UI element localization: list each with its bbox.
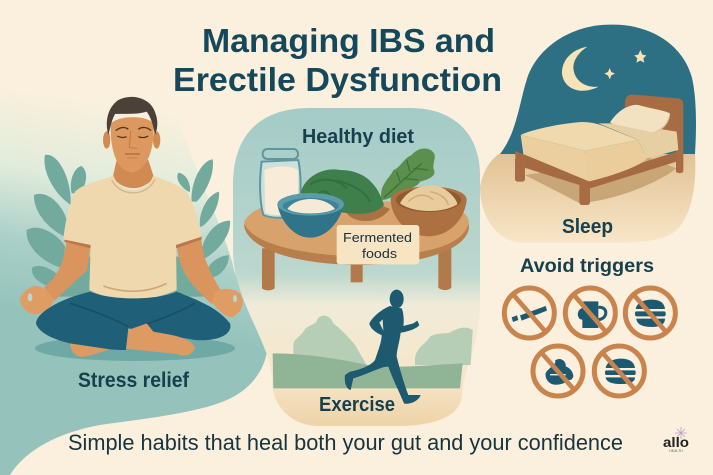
shadow: [35, 336, 235, 361]
fermented bowl: [391, 185, 467, 236]
logo: allo health: allo: [663, 434, 689, 450]
blob: [233, 108, 480, 426]
logo: allo health: [663, 427, 689, 453]
icon: no smoking: [504, 288, 554, 338]
shirt: [63, 175, 202, 299]
stars: [634, 50, 646, 63]
sleeve bands: [64, 239, 91, 248]
milk jar: [260, 149, 301, 218]
panel: stress relief: [0, 60, 268, 475]
icons: [504, 288, 675, 396]
leaves: [27, 155, 230, 297]
panel: diet and exercise: [233, 108, 480, 426]
feet: [126, 323, 195, 356]
table scene: [244, 149, 473, 388]
label: exercise: Exercise: [319, 394, 395, 416]
label: fermented foods: Fermented: [343, 230, 412, 245]
title: Erectile Dysfunction: [173, 61, 502, 98]
icon: no burger: [594, 346, 644, 396]
bed: [515, 95, 683, 205]
runner: [345, 290, 421, 404]
neck: [113, 160, 154, 188]
label: healthy diet: Healthy diet: [302, 126, 414, 148]
logo: allo health: HEALTH: [669, 449, 683, 453]
tagline: Simple habits that heal both your gut and your confidence: [68, 430, 623, 455]
title: [173, 22, 502, 98]
hills: [273, 316, 473, 388]
moon: [562, 47, 599, 91]
label: stress relief: Stress relief: [78, 369, 190, 392]
icon: no alcohol: [565, 288, 615, 338]
icon: no fast food: [625, 288, 675, 338]
pants: [36, 292, 230, 350]
panel: avoid triggers: [504, 256, 675, 396]
arms: [44, 239, 91, 302]
panel: sleep: [480, 25, 696, 243]
head: [103, 97, 160, 173]
title: Managing IBS and: [202, 22, 495, 59]
label: sleep: Sleep: [562, 216, 613, 238]
meditating man: [20, 155, 243, 361]
night sky: [500, 25, 696, 154]
yogurt bowl: [277, 193, 344, 238]
teal blob background: [0, 60, 268, 475]
heading: Avoid triggers: [520, 256, 654, 277]
floor blob: [480, 153, 695, 243]
leafy greens: [301, 149, 435, 221]
icon: no fried food: [533, 346, 583, 396]
table: [244, 202, 469, 290]
fermented foods tag: [337, 225, 419, 264]
panel: diet and exercise: foods: [362, 246, 398, 261]
